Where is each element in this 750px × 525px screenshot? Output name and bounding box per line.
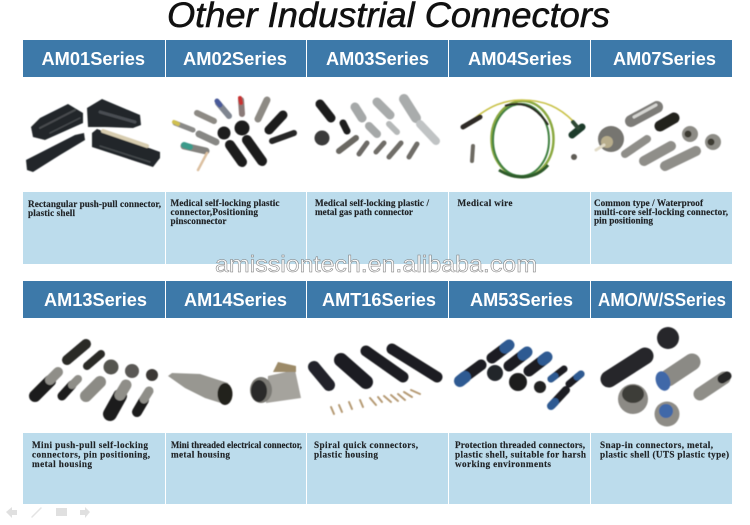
image: medical wire bbox=[463, 100, 582, 177]
description: AM02 bbox=[166, 192, 306, 264]
image: medical plastic connectors bbox=[174, 98, 294, 170]
image: snap-in connectors bbox=[609, 327, 727, 426]
description: AM13 bbox=[23, 433, 165, 504]
image: metal connectors bbox=[596, 105, 721, 166]
description: AM04 bbox=[449, 192, 590, 264]
image: mini threaded connectors bbox=[168, 362, 301, 405]
heading: AM03 bbox=[307, 40, 448, 77]
heading: AM01 bbox=[23, 40, 165, 77]
description: AM53: Protection threaded connectors, bbox=[455, 440, 585, 450]
heading: AMT16 bbox=[307, 281, 448, 318]
description: AMT16: plastic housing bbox=[314, 450, 378, 460]
icons: slide navigation controls bbox=[6, 507, 90, 518]
heading: AMO/W/S: AMO/W/SSeries bbox=[598, 290, 726, 310]
description: AM02: connector,Positioning bbox=[170, 207, 258, 217]
description: AM13: connectors, pin positioning, bbox=[32, 450, 150, 460]
description: AM03: Medical self-locking plastic / bbox=[315, 198, 429, 208]
description: AM01: Rectangular push-pull connector, bbox=[28, 199, 161, 209]
description: AM02: Medical self-locking plastic bbox=[170, 198, 280, 208]
panel: AM07 series bbox=[591, 40, 732, 264]
description: AM07: pin positioning bbox=[594, 216, 653, 226]
heading: AM04: AM04Series bbox=[468, 49, 572, 69]
panel: AMO/W/S series bbox=[591, 281, 732, 504]
image: spiral quick connectors bbox=[314, 349, 437, 414]
description: AM02: pinsconnector bbox=[170, 216, 226, 226]
image: mini push-pull connectors bbox=[35, 344, 158, 414]
heading: AM02: AM02Series bbox=[183, 49, 287, 69]
description: AMO/W/S bbox=[591, 433, 732, 504]
heading: AM03: AM03Series bbox=[326, 49, 429, 69]
description: AMT16 bbox=[307, 433, 448, 504]
heading: AM07: AM07Series bbox=[613, 49, 716, 69]
description: AMO/W/S: plastic shell (UTS plastic type) bbox=[600, 450, 729, 460]
heading: AM13: AM13Series bbox=[44, 290, 147, 310]
description: AM01: plastic shell bbox=[28, 208, 75, 218]
description: AM04: Medical wire bbox=[458, 198, 512, 208]
description: AM07: Common type / Waterproof bbox=[594, 198, 704, 208]
image: gas path connectors bbox=[314, 99, 436, 157]
image: protection threaded connectors bbox=[460, 345, 581, 406]
heading: AM01: AM01Series bbox=[42, 49, 145, 69]
description: AM01 bbox=[23, 192, 165, 264]
description: AMT16: Spiral quick connectors, bbox=[314, 440, 418, 450]
description: AM14: Mini threaded electrical connector, bbox=[171, 440, 302, 450]
panel: AM03 series bbox=[307, 40, 448, 264]
panel: AM01 series bbox=[23, 40, 165, 264]
description: AM03: metal gas path connector bbox=[315, 207, 413, 217]
panel: AM53 series bbox=[449, 281, 590, 504]
heading: AM14: AM14Series bbox=[184, 290, 287, 310]
heading: AM04 bbox=[449, 40, 590, 77]
description: AM53: plastic shell, suitable for harsh bbox=[455, 450, 586, 460]
heading: AMO/W/S bbox=[591, 281, 732, 318]
heading: AM53: AM53Series bbox=[470, 290, 573, 310]
panel: AM14 series bbox=[166, 281, 306, 504]
panel: AM02 series bbox=[166, 40, 306, 264]
description: AM07: multi-core self-locking connector, bbox=[594, 207, 728, 217]
image: rectangular connectors bbox=[26, 99, 160, 172]
heading: AM53 bbox=[449, 281, 590, 318]
description: AM14 bbox=[166, 433, 306, 504]
heading: AM13 bbox=[23, 281, 165, 318]
description: AM03 bbox=[307, 192, 448, 264]
description: AM53: working environments bbox=[455, 459, 551, 469]
panel: AMT16 series bbox=[307, 281, 448, 504]
heading: AM07 bbox=[591, 40, 732, 77]
description: AM14: metal housing bbox=[171, 450, 230, 460]
heading: AMT16: AMT16Series bbox=[322, 290, 436, 310]
description: AM53 bbox=[449, 433, 590, 504]
panel: AM04 series bbox=[449, 40, 590, 264]
heading: AM14 bbox=[166, 281, 306, 318]
heading: AM02 bbox=[166, 40, 306, 77]
panel: AM13 series bbox=[23, 281, 165, 504]
description: AM13: Mini push-pull self-locking bbox=[32, 440, 148, 450]
description: AM07 bbox=[591, 192, 732, 264]
description: AMO/W/S: Snap-in connectors, metal, bbox=[600, 440, 713, 450]
description: AM13: metal housing bbox=[32, 459, 92, 469]
watermark: amissiontech.en.alibaba.com bbox=[215, 251, 537, 277]
